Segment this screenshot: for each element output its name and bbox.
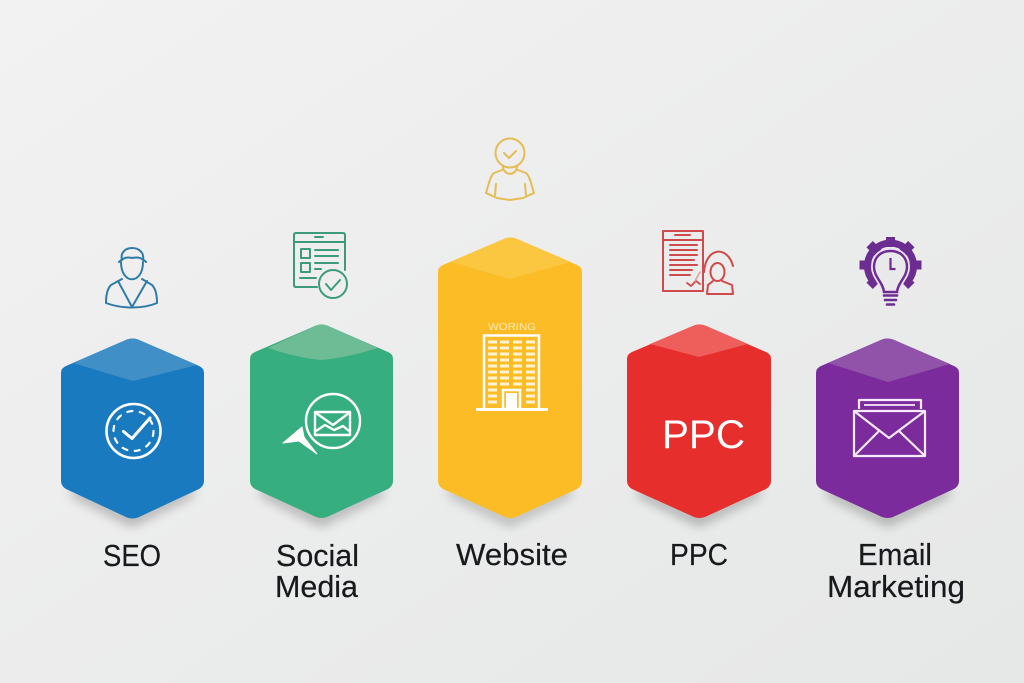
block top face: Email Marketing: [828, 338, 950, 382]
hexagonal block: Social Media: [250, 324, 393, 518]
block shadow: SEO: [72, 487, 193, 526]
block top face: Social Media: [268, 324, 378, 360]
icon: document and person: [663, 231, 733, 294]
label: Social Media: [275, 539, 359, 604]
label: Social Media: Media: [275, 570, 358, 604]
block top face: SEO: [73, 338, 197, 381]
label: SEO: SEO: [103, 539, 161, 573]
block icon text: PPC: PPC: [662, 413, 745, 457]
column: Email Marketing: [816, 237, 965, 604]
column: SEO: [61, 248, 204, 573]
column: PPC: [627, 231, 771, 572]
block top face: PPC: [650, 324, 748, 357]
block shadow: Social Media: [261, 487, 382, 526]
block shadow: Email Marketing: [827, 487, 949, 526]
label: PPC: PPC: [670, 538, 728, 572]
block shadow: Website: [449, 487, 571, 526]
column: Website: [438, 138, 582, 572]
icon: checklist form: [294, 233, 347, 298]
icon: dashed clock check: [106, 404, 160, 458]
icon: person with check: [486, 138, 534, 200]
label: Email Marketing: [827, 538, 965, 604]
hexagonal block: PPC: [627, 324, 771, 518]
column: Social Media: [250, 233, 393, 604]
icon: mail bubble: [283, 394, 360, 454]
hexagonal block: Email Marketing: [816, 338, 959, 518]
label: Website: Website: [456, 538, 568, 572]
building sign text: WORING: [488, 321, 536, 333]
icon: envelope: [854, 400, 925, 456]
block top face: Website: [450, 238, 571, 279]
label: Email Marketing: Marketing: [827, 570, 965, 604]
tall hexagonal block: Website: [438, 238, 582, 518]
label: Social Media: Social: [276, 539, 359, 573]
block shadow: PPC: [638, 487, 760, 526]
label: Email Marketing: Email: [858, 538, 932, 572]
icon: gear light bulb: [860, 237, 922, 304]
hexagonal block: SEO: [61, 338, 204, 518]
icon: engineer outline: [106, 248, 157, 308]
icon: office building: [476, 321, 548, 410]
